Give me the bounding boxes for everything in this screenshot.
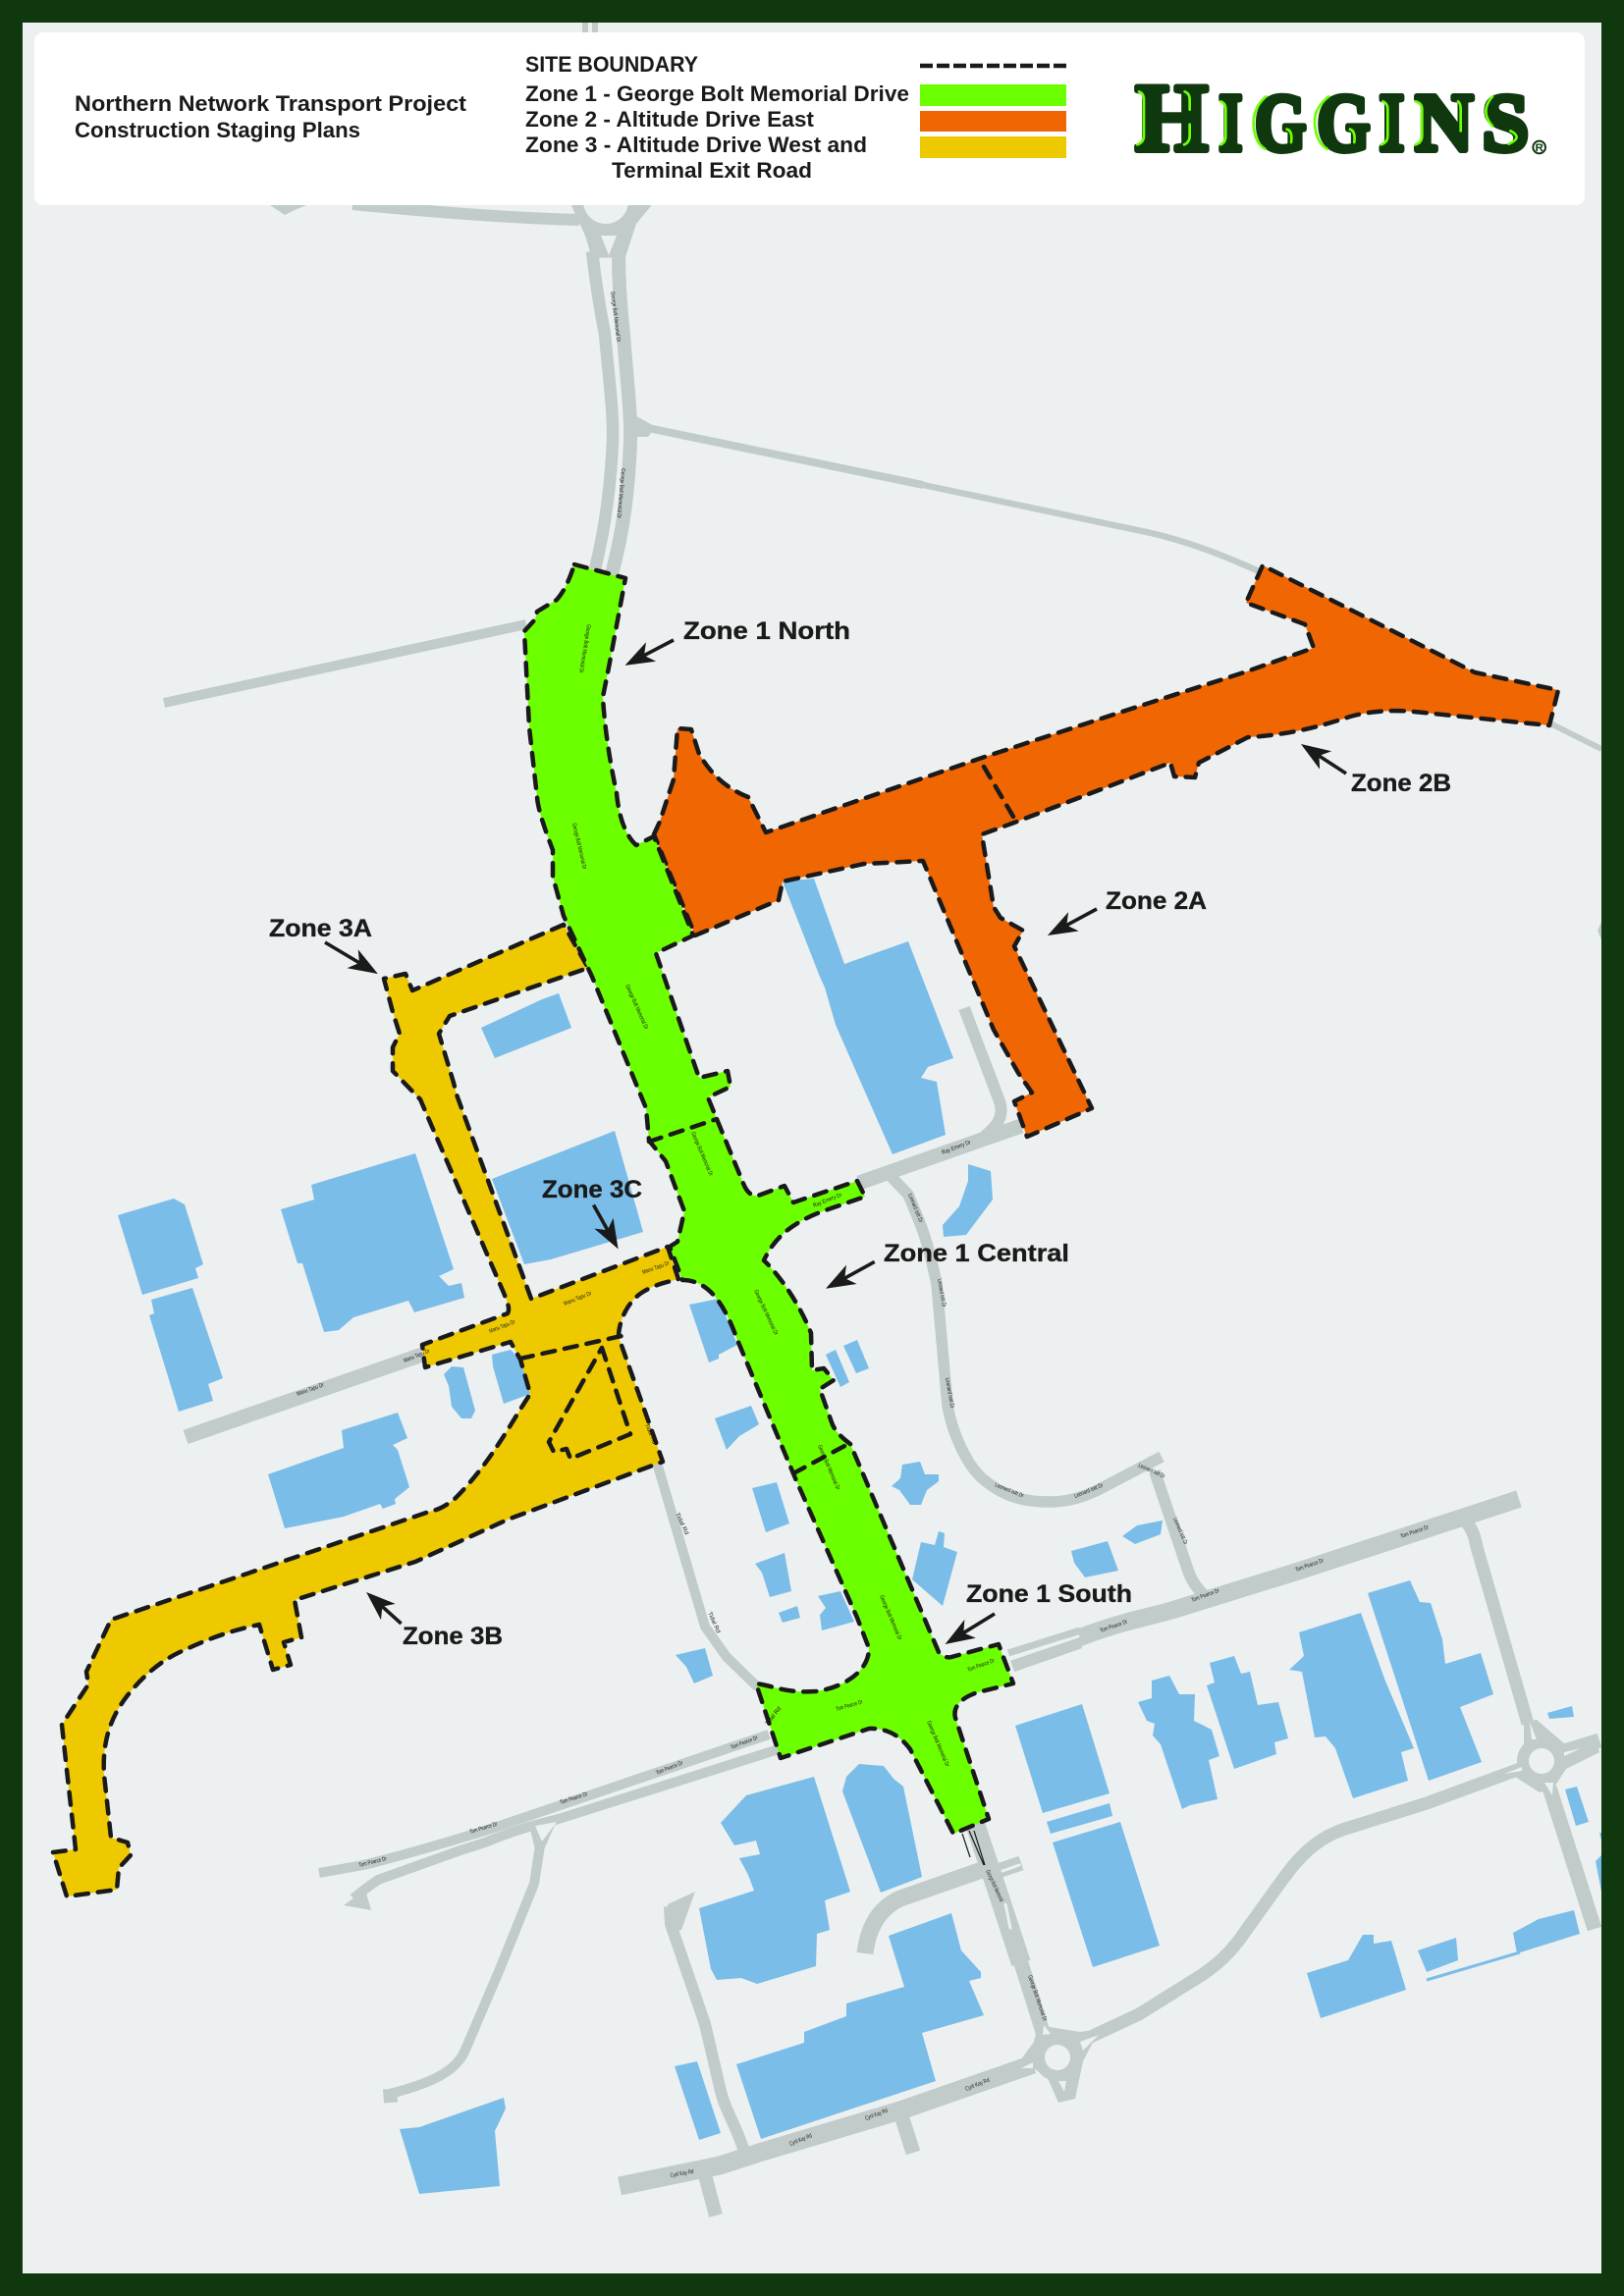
zone 1: George Bolt Memorial Drive xyxy=(524,564,1013,1865)
road name labels: Cyril Kay Rd xyxy=(965,2078,991,2093)
road name labels: Tom Pearce Dr xyxy=(1191,1588,1220,1604)
buildings xyxy=(118,879,1601,2194)
road name labels: Tom Pearce Dr xyxy=(560,1791,588,1806)
road name labels: George Bolt Memorial Dr xyxy=(609,292,621,343)
road name labels xyxy=(297,292,1430,2179)
road name labels: Tom Pearce Dr xyxy=(836,1699,863,1713)
road name labels: Manu Tapu Dr xyxy=(489,1319,516,1335)
zone 3: Altitude Drive West and Terminal Exit Road xyxy=(53,925,678,1896)
logo: Higgins xyxy=(1135,65,1545,172)
header panel xyxy=(34,32,1585,205)
road name labels: George Bolt Memorial Dr xyxy=(1026,1975,1048,2022)
logo: Higgins: G xyxy=(1317,79,1370,169)
road name labels: Leonard Isitt Dr xyxy=(944,1377,954,1409)
road name labels: Leonard Isitt Dr xyxy=(936,1278,947,1308)
road name labels: Tidal Rd xyxy=(643,1423,657,1445)
road name labels: George Bolt Memorial Dr xyxy=(623,984,649,1031)
title: Northern Network Transport Project xyxy=(75,91,467,116)
logo: Higgins: I xyxy=(1218,79,1242,169)
road name labels: Tom Pearce Dr xyxy=(1400,1524,1430,1540)
callout: Zone 3B: Zone 3B xyxy=(403,1623,503,1650)
road name labels: Leonard Isitt Dr xyxy=(1171,1517,1188,1545)
road name labels: Ray Emery Dr xyxy=(813,1193,842,1209)
callout: Zone 3C xyxy=(542,1176,642,1242)
road name labels: George Bolt Memorial Dr xyxy=(816,1444,840,1491)
legend: Zone 3 - Altitude Drive West and xyxy=(525,133,867,157)
road name labels: Tom Pearce Dr xyxy=(469,1822,498,1836)
road name labels: Tom Pearce Dr xyxy=(358,1856,388,1869)
callout: Zone 2A xyxy=(1055,887,1207,932)
road name labels: George Bolt Memorial Dr xyxy=(752,1289,779,1336)
road name labels: Leonard Isitt Dr xyxy=(1074,1483,1104,1500)
road name labels: Manu Tapu Dr xyxy=(564,1291,593,1308)
road name labels: Manu Tapu Dr xyxy=(404,1349,431,1364)
legend: Terminal Exit Road xyxy=(612,158,812,183)
road name labels: Tom Pearce Dr xyxy=(731,1735,759,1751)
logo: Higgins: G xyxy=(1255,79,1306,169)
callout: Zone 1 South xyxy=(951,1580,1132,1640)
callout: Zone 2B xyxy=(1308,748,1451,797)
title xyxy=(75,91,467,142)
road name labels: George Bolt Memorial Dr xyxy=(577,624,591,673)
callout: Zone 3B xyxy=(372,1597,503,1650)
road name labels: Cyril Kay Rd xyxy=(865,2109,889,2122)
legend: Zone 1 - George Bolt Memorial Drive xyxy=(525,81,909,106)
logo: Higgins: I xyxy=(1380,79,1404,169)
road name labels: Manu Tapu Dr xyxy=(642,1260,671,1276)
callout: Zone 3C: Zone 3C xyxy=(542,1176,642,1203)
road name labels: Leonard Isitt Dr xyxy=(994,1482,1024,1499)
callout: Zone 3A xyxy=(269,915,372,970)
road name labels: George Bolt Memorial xyxy=(984,1869,1003,1903)
callout: Zone 1 Central xyxy=(833,1240,1069,1285)
road name labels: Tom Pearce Dr xyxy=(1100,1620,1128,1634)
callout: Zone 1 South: Zone 1 South xyxy=(966,1580,1132,1608)
road name labels: Cyril Kay Rd xyxy=(670,2169,694,2179)
road name labels: Ray Emery Dr xyxy=(942,1140,972,1156)
road name labels: Cyril Kay Rd xyxy=(789,2133,813,2148)
road name labels: George Bolt Memorial Dr xyxy=(570,823,587,870)
callout: Zone 1 North xyxy=(632,617,850,662)
legend: Zone 2 - Altitude Drive East xyxy=(525,107,815,132)
road name labels: Tidal Rd xyxy=(765,1706,783,1727)
road name labels: Leonard Isitt Dr xyxy=(906,1194,923,1223)
callout: Zone 3A: Zone 3A xyxy=(269,915,372,942)
legend xyxy=(525,52,1066,183)
callout: Zone 2B: Zone 2B xyxy=(1351,770,1451,797)
road name labels: George Bolt Memorial Dr xyxy=(925,1720,949,1768)
logo: Higgins: R xyxy=(1536,142,1543,154)
road name labels: Tidal Rd xyxy=(674,1512,689,1536)
road name labels: Tidal Rd xyxy=(706,1611,721,1634)
title: Construction Staging Plans xyxy=(75,118,360,142)
road name labels: Tom Pearce Dr xyxy=(656,1760,684,1777)
road name labels: Manu Tapu Dr xyxy=(297,1382,325,1398)
road name labels: Tom Pearce Dr xyxy=(967,1658,996,1674)
logo: Higgins: H xyxy=(1135,65,1208,172)
road name labels: George Bolt Memorial Dr xyxy=(616,468,625,518)
road name labels: Leonard Isitt Dr xyxy=(1137,1463,1165,1480)
road name labels: George Bolt Memorial Dr xyxy=(878,1594,902,1641)
legend: SITE BOUNDARY xyxy=(525,52,698,77)
logo: Higgins: S xyxy=(1483,79,1529,169)
road name labels: George Bolt Memorial Dr xyxy=(689,1131,713,1177)
logo: Higgins: N xyxy=(1415,79,1473,169)
callout: Zone 1 Central: Zone 1 Central xyxy=(884,1240,1069,1267)
splitter islands and medians xyxy=(1011,1636,1078,1659)
zone 2: Altitude Drive East xyxy=(654,565,1558,1137)
callout: Zone 2A: Zone 2A xyxy=(1106,887,1207,915)
road name labels: Tom Pearce Dr xyxy=(1295,1558,1325,1574)
callout: Zone 1 North: Zone 1 North xyxy=(683,617,850,645)
